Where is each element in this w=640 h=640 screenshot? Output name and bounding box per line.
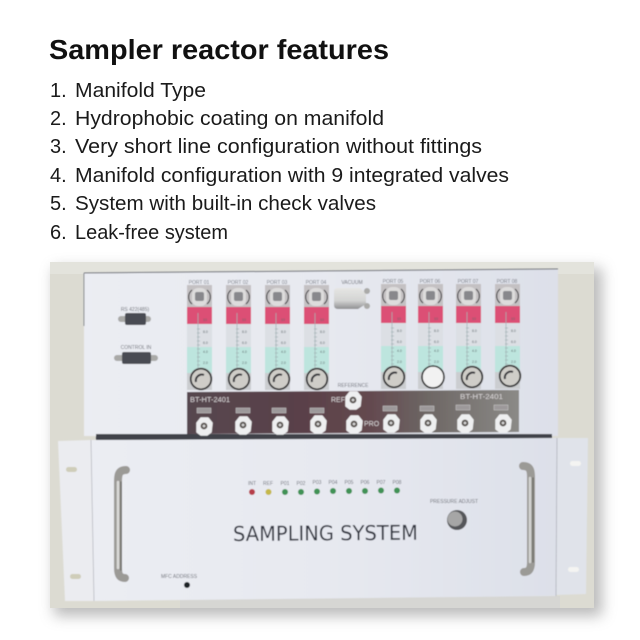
manifold plate: PRO [364, 421, 380, 428]
left handle [118, 470, 126, 578]
item 4: 4. [50, 165, 67, 187]
flowmeter: port 05 [381, 279, 406, 389]
manifold plate: BT-HT-2401 [460, 394, 503, 401]
status LEDs: REF [263, 481, 273, 487]
flowmeter: port 02 [226, 280, 251, 390]
item 2: Hydrophobic coating on manifold [75, 108, 384, 130]
upper unit: flowmeter box [84, 269, 558, 440]
connector: RS 422: RS 422(485) [121, 307, 150, 313]
vacuum port [334, 280, 370, 309]
item 3: Very short line configuration without fittings [75, 136, 482, 158]
item 6: 6. [50, 222, 67, 244]
flowmeter: port 03: PORT 03 [267, 280, 288, 286]
status LEDs: P06 [361, 480, 370, 486]
item 5: 5. [50, 193, 67, 215]
status LEDs: P04 [329, 480, 338, 486]
item 1: 1. [50, 80, 67, 102]
flowmeter: port 03 [265, 280, 290, 390]
status LEDs: P07 [377, 480, 386, 486]
mfc address: MFC ADDRESS [161, 574, 198, 580]
feature list [50, 80, 509, 244]
photo: sampling system equipment [50, 262, 602, 616]
status LEDs: P01 [281, 481, 290, 487]
flowmeter: port 02: PORT 02 [228, 280, 249, 286]
flowmeter: port 07: PORT 07 [458, 279, 479, 285]
flowmeter knobs [190, 364, 522, 390]
status LEDs: P08 [393, 480, 402, 486]
pressure adjust knob: PRESSURE ADJUST [430, 499, 478, 505]
flowmeter: port 01 [187, 280, 212, 390]
manifold plate: BT-HT-2401 [190, 397, 230, 404]
reference label: REFERENCE [338, 383, 369, 389]
status LEDs [248, 480, 402, 495]
mfc address [161, 574, 198, 588]
flowmeter: port 07 [456, 279, 481, 389]
vacuum port: VACUUM [341, 280, 363, 286]
connector: RS 422 [118, 307, 151, 325]
flowmeter: port 05: PORT 05 [383, 279, 404, 285]
status LEDs: P05 [345, 480, 354, 486]
flowmeter: port 06 [418, 279, 443, 389]
connector: control in: CONTROL IN [121, 345, 152, 351]
manifold plate: REF [331, 397, 345, 404]
item 4: Manifold configuration with 9 integrated valves [75, 165, 509, 187]
pressure adjust knob [430, 499, 478, 530]
flowmeter: port 08: PORT 08 [497, 279, 518, 285]
flowmeter: port 04: PORT 04 [306, 280, 327, 286]
flowmeter: port 04 [304, 280, 329, 390]
flowmeter: port 01: PORT 01 [189, 280, 210, 286]
item 6: Leak-free system [75, 222, 228, 244]
flowmeter: port 08 [495, 279, 520, 389]
item 5: System with built-in check valves [75, 193, 376, 215]
flowmeter: port 06: PORT 06 [420, 279, 441, 285]
manifold plate [187, 390, 519, 435]
right handle [523, 466, 533, 572]
lower unit: sampling system panel [58, 438, 588, 601]
title: Sampler reactor features [49, 34, 389, 65]
panel name: SAMPLING SYSTEM [233, 521, 418, 546]
item 1: Manifold Type [75, 80, 206, 102]
status LEDs: P02 [297, 481, 306, 487]
status LEDs: INT [248, 481, 256, 487]
item 2: 2. [50, 108, 67, 130]
rack slots [66, 461, 581, 579]
connector: control in [114, 345, 158, 364]
item 3: 3. [50, 136, 67, 158]
status LEDs: P03 [313, 480, 322, 486]
